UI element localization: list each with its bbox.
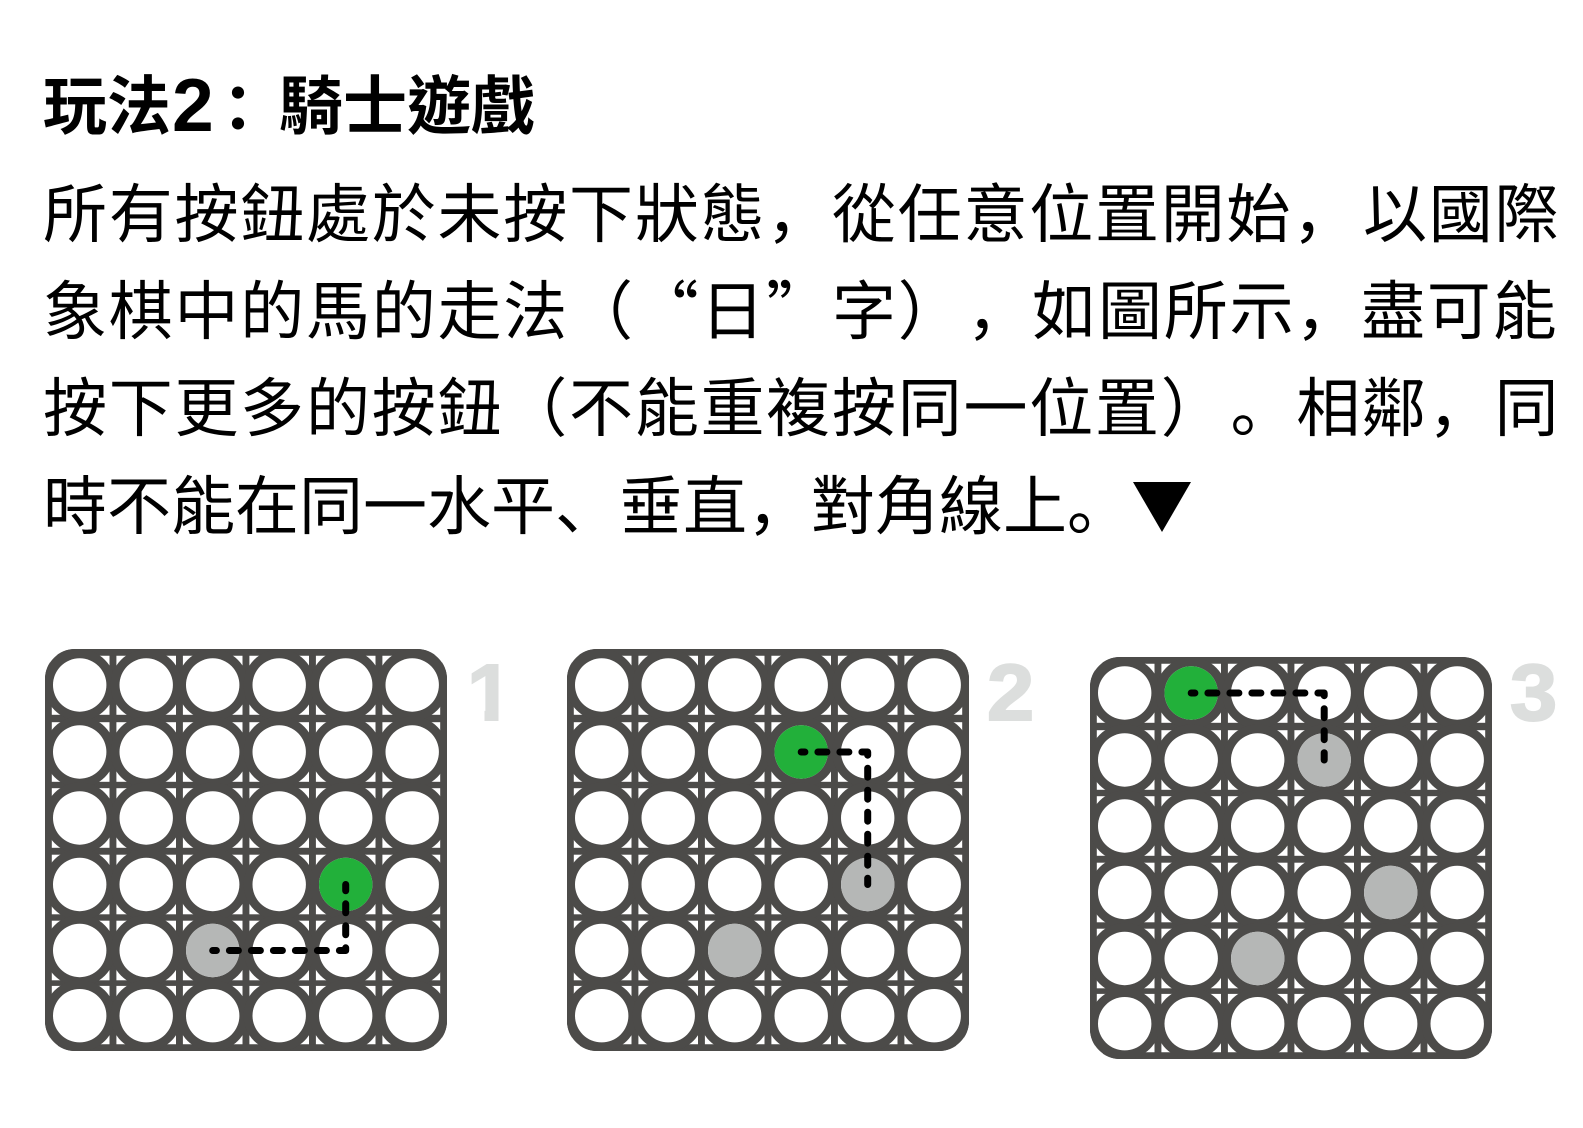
current button: green bbox=[319, 858, 372, 911]
pressed button: grey bbox=[1364, 866, 1417, 919]
step number 2: 2 bbox=[987, 648, 1034, 737]
title: 騎士遊戲 bbox=[279, 56, 535, 148]
step number 1: 1 bbox=[467, 648, 513, 738]
current button: green bbox=[1164, 666, 1218, 720]
pressed button: grey bbox=[186, 924, 239, 977]
pressed button: grey bbox=[1231, 932, 1284, 985]
knight move path bbox=[801, 752, 868, 884]
pressed button: grey bbox=[841, 858, 894, 911]
body line 4: 時不能在同一水平、垂直，對角線上。 bbox=[43, 456, 1131, 548]
pressed button: grey bbox=[1298, 733, 1351, 787]
body line 3: 。 bbox=[1230, 358, 1296, 450]
body line 2: 象棋中的馬的走法（“日”字） bbox=[43, 261, 964, 353]
body line 3: 相鄰， bbox=[1296, 358, 1494, 450]
current button: green bbox=[774, 725, 828, 779]
body line 1: 以國際 bbox=[1363, 164, 1560, 256]
title: 2 bbox=[172, 63, 214, 147]
board 2 bbox=[566, 649, 970, 1051]
body line 2: ， bbox=[966, 261, 1032, 353]
icon: downward triangle bbox=[1133, 482, 1191, 532]
step number 3: 3 bbox=[1510, 648, 1557, 737]
body text bbox=[43, 164, 1560, 548]
body line 1: 所有按鈕處於未按下狀態，從任意位置開始， bbox=[43, 164, 1358, 256]
pressed button: grey bbox=[708, 924, 761, 977]
title: 玩法 bbox=[43, 56, 171, 148]
knight move path bbox=[213, 884, 346, 950]
board 1 bbox=[44, 649, 448, 1051]
knight move path bbox=[1191, 693, 1324, 760]
title: ： bbox=[222, 56, 286, 148]
board 3 bbox=[1089, 657, 1493, 1059]
body line 3: 同 bbox=[1494, 358, 1560, 450]
body line 2: 如圖所示，盡可能 bbox=[1032, 261, 1558, 353]
body line 3: 按下更多的按鈕（不能重複按同一位置） bbox=[43, 358, 1226, 450]
